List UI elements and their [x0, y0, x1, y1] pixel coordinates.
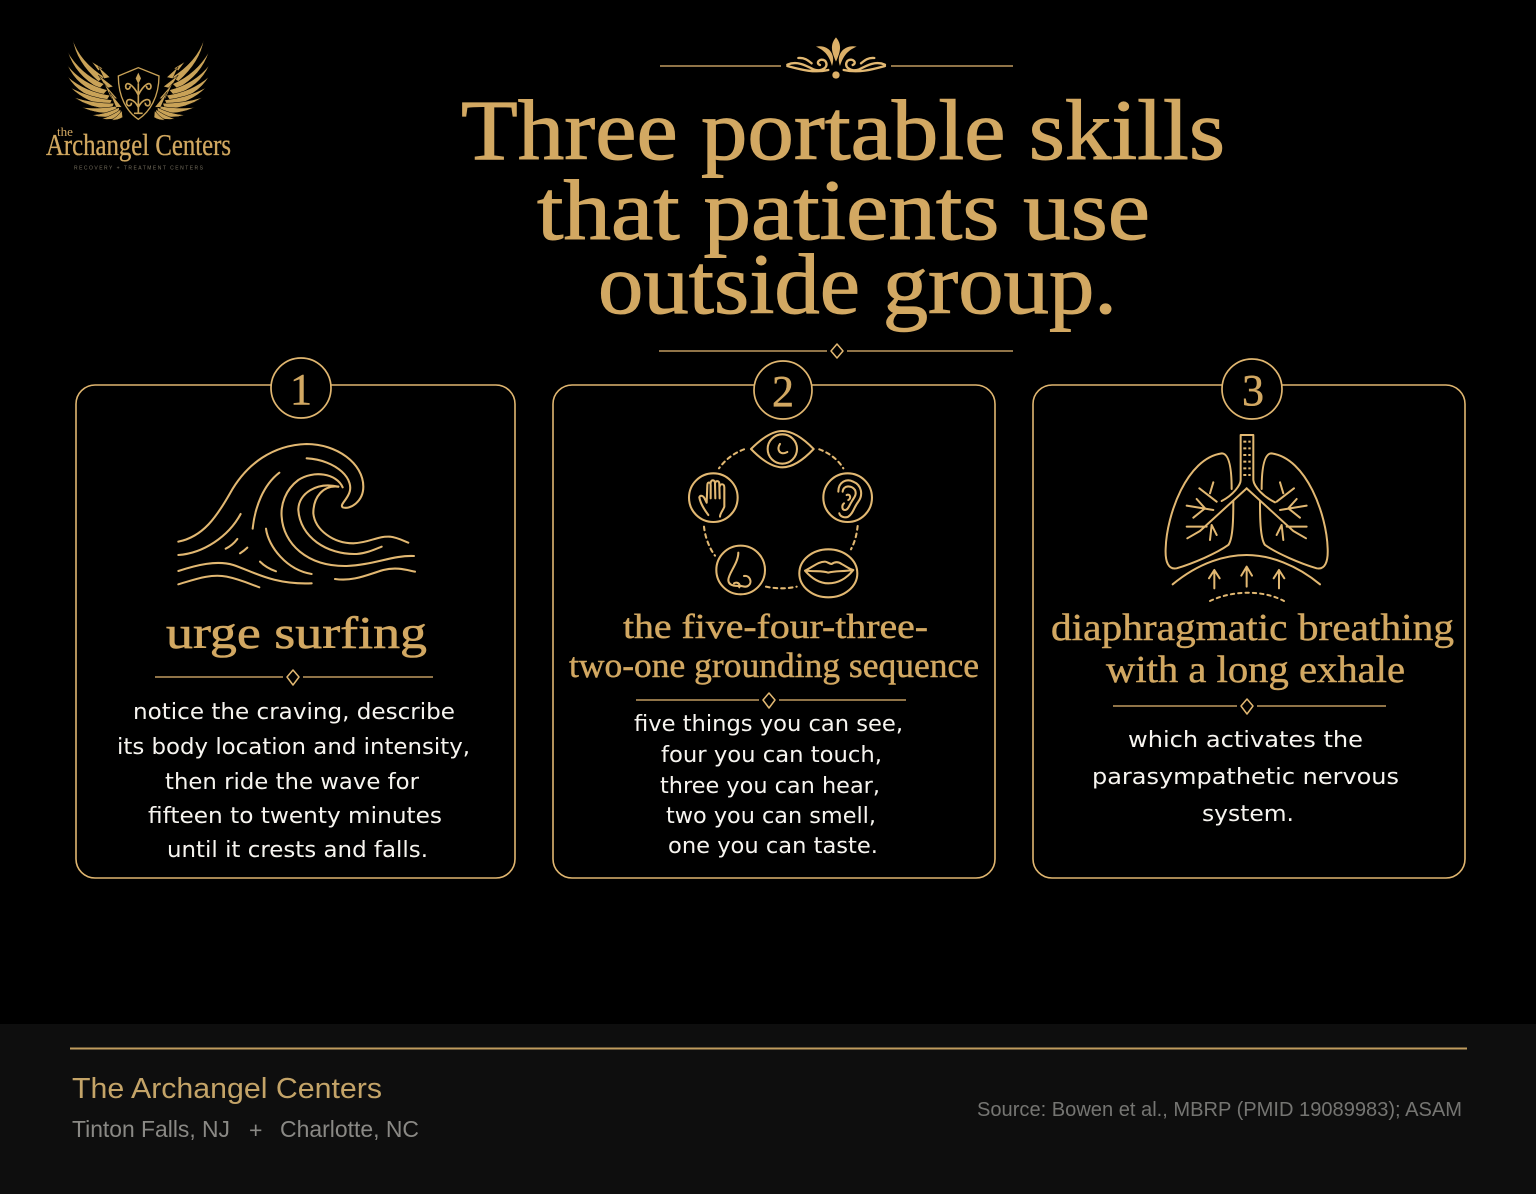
title — [461, 82, 1225, 332]
text: urge surfing description — [117, 699, 470, 863]
footer locations: Tinton Falls, NJ — [72, 1116, 230, 1142]
badge: number 1 — [271, 358, 331, 418]
divider — [636, 693, 906, 708]
heading: diaphragmatic breathing: with a long exhale — [1106, 649, 1405, 691]
text: grounding description: one you can taste. — [668, 833, 878, 859]
divider — [155, 670, 433, 685]
logo: The Archangel Centers: the — [57, 124, 73, 139]
badge: number 3 — [1222, 359, 1282, 419]
title: Three portable skills — [461, 82, 1225, 178]
text: grounding description: two you can smell, — [666, 803, 876, 829]
heading: grounding sequence: two-one grounding sequence — [569, 646, 979, 685]
logo: The Archangel Centers — [46, 39, 231, 172]
heading: diaphragmatic breathing — [1051, 607, 1454, 691]
text: urge surfing description: until it crests and falls. — [167, 837, 428, 863]
heading: grounding sequence — [569, 607, 979, 685]
panel: five-four-three-two-one — [553, 361, 995, 878]
text: grounding description — [634, 711, 903, 859]
logo: The Archangel Centers: RECOVERY + TREATMENT CENTERS — [74, 166, 204, 172]
footer locations: + — [249, 1117, 262, 1143]
footer brand name: The Archangel Centers — [72, 1073, 382, 1105]
text: urge surfing description: then ride the wave for — [165, 769, 420, 795]
footer locations: Charlotte, NC — [280, 1116, 419, 1142]
text: grounding description: five things you can see, — [634, 711, 903, 737]
title: that patients use — [537, 162, 1150, 258]
icon: wave — [178, 444, 415, 587]
divider — [1113, 699, 1386, 714]
badge: number 1: 1 — [290, 365, 312, 414]
text: urge surfing description: fifteen to twenty minutes — [148, 803, 442, 829]
footer — [0, 1024, 1536, 1194]
text: grounding description: three you can hear, — [660, 773, 880, 799]
badge: number 2 — [754, 361, 812, 419]
text: urge surfing description: notice the craving, describe — [133, 699, 455, 725]
text: grounding description: four you can touch, — [661, 742, 882, 768]
text: breathing description — [1092, 727, 1399, 827]
logo: The Archangel Centers: Archangel Centers — [46, 127, 231, 162]
footer source: Source: Bowen et al., MBRP (PMID 19089983); ASAM — [977, 1099, 1462, 1121]
title: outside group. — [598, 236, 1117, 332]
badge: number 3: 3 — [1242, 366, 1264, 415]
heading: urge surfing: urge surfing — [166, 607, 427, 658]
panel: diaphragmatic breathing — [1033, 359, 1465, 878]
badge: number 2: 2 — [772, 367, 794, 416]
heading: grounding sequence: the five-four-three- — [623, 607, 928, 646]
footer locations — [72, 1116, 419, 1143]
text: breathing description: parasympathetic nervous — [1092, 764, 1399, 790]
text: breathing description: which activates the — [1128, 727, 1363, 753]
heading: diaphragmatic breathing: diaphragmatic breathing — [1051, 607, 1454, 649]
icon: lungs and diaphragm — [1166, 435, 1328, 601]
text: breathing description: system. — [1202, 801, 1294, 827]
panel: urge surfing — [76, 358, 515, 878]
icon: five senses — [689, 431, 872, 597]
text: urge surfing description: its body location and intensity, — [117, 734, 470, 760]
ornament: top flourish divider — [660, 37, 1013, 79]
title divider with diamond — [659, 344, 1013, 358]
